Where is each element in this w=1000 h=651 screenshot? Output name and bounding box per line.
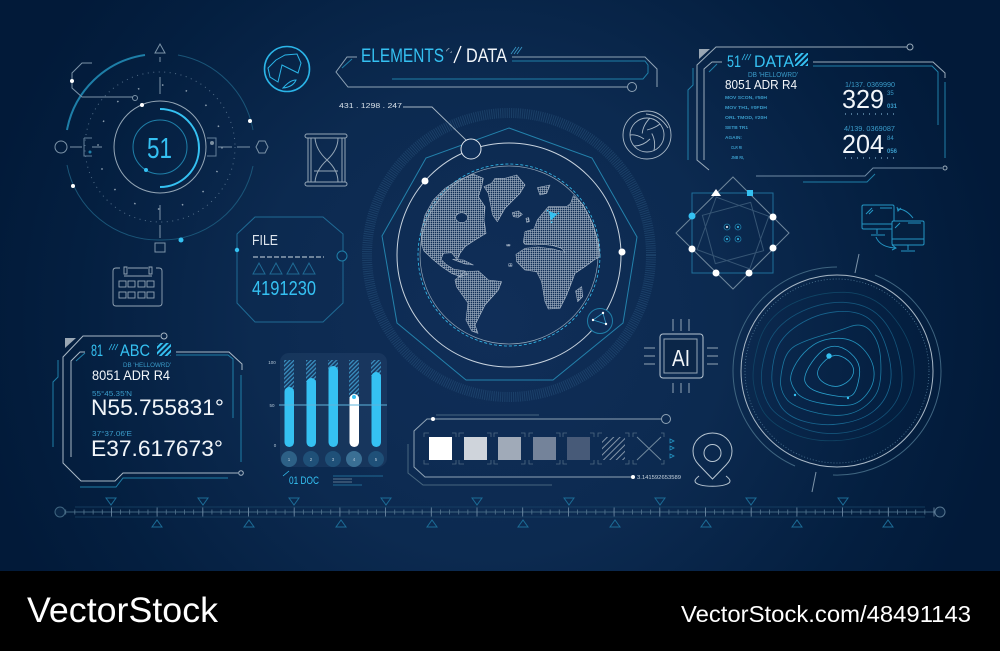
icon: map pin: [693, 433, 732, 486]
panel: data: 056: [887, 149, 898, 155]
world map: [421, 174, 600, 333]
panel: file: [235, 217, 347, 322]
palette panel: 3.141592653589: [637, 475, 681, 481]
panel: data: JNB RI,: [731, 155, 744, 160]
panel: data: DATA: [754, 52, 795, 71]
icon: earth: [264, 46, 310, 92]
radar gauge: 51: [147, 133, 172, 165]
icon: monitors: [862, 205, 924, 251]
panel: data: 1/137. 0369990: [845, 82, 895, 89]
terrain map: [733, 254, 941, 492]
panel: data: 329: [842, 84, 884, 114]
panel: data: AGAIN:: [725, 135, 743, 140]
panel: data: MOV TH1, #0FDH: [725, 105, 767, 110]
footer band: [0, 571, 1000, 651]
panel: data: 204: [842, 129, 884, 159]
bar chart: 100: [268, 360, 276, 365]
panel: coordinates: 55°45.35'N: [92, 390, 132, 398]
bar chart: 01 DOC: [289, 475, 319, 487]
bar chart: 0: [274, 443, 277, 448]
panel: coordinates: 37°37.06'E: [92, 430, 132, 438]
panel: coordinates: E37.617673°: [91, 436, 223, 461]
footer band: VectorStock.com/48491143: [681, 601, 971, 627]
panel: data: 51: [727, 52, 741, 71]
panel: coordinates: 8051 ADR R4: [92, 367, 170, 383]
panel: data: DB 'HELLOWRD': [748, 72, 798, 79]
bar chart: [268, 353, 387, 487]
panel: data: ORL TMOD, #20H: [725, 115, 767, 120]
contour lines: [753, 292, 914, 441]
icon: AI chip: [644, 319, 718, 393]
panel: data: 35: [887, 91, 894, 97]
panel: data: CLR RI: [731, 145, 742, 150]
panel: data: 4/139. 0369087: [844, 126, 895, 133]
panel: data: 031: [887, 104, 898, 110]
bar chart: 4: [353, 457, 356, 462]
geometric diagram: [676, 177, 789, 289]
icon: AI chip: AI: [672, 345, 690, 371]
header panel: elements / data: DATA: [466, 45, 507, 67]
bar chart: 3: [332, 457, 335, 462]
panel: data: 84: [887, 136, 894, 142]
bar chart: 2: [310, 457, 313, 462]
bar chart: 1: [288, 457, 291, 462]
panel: coordinates: DB 'HELLOWRD': [123, 362, 171, 369]
globe: [367, 113, 651, 397]
timeline: [55, 498, 945, 527]
panel: coordinates: N55.755831°: [91, 395, 224, 420]
icon: calendar: [113, 267, 162, 306]
panel: data: MOV SCON, #50H: [725, 95, 767, 100]
coordinate label: 431 . 1298 . 247: [339, 103, 402, 110]
panel: data: [688, 44, 947, 182]
panel: coordinates: [53, 333, 243, 487]
panel: data: SETB TR1: [725, 125, 749, 130]
radar gauge: [55, 44, 268, 252]
panel: coordinates: ABC: [120, 341, 150, 360]
palette panel: [408, 414, 681, 485]
coordinate label: [339, 103, 467, 141]
header panel: elements / data: ELEMENTS: [361, 45, 444, 67]
icon: hourglass: [305, 134, 347, 186]
panel: file: FILE: [252, 232, 278, 249]
icon: network badge: [588, 308, 612, 334]
bar chart: 5: [375, 457, 378, 462]
header panel: elements / data: [336, 45, 657, 92]
footer band: VectorStock: [27, 591, 219, 630]
icon: aperture: [623, 111, 671, 159]
panel: file: 4191230: [252, 278, 316, 300]
panel: data: 8051 ADR R4: [725, 77, 797, 92]
panel: coordinates: 81: [91, 341, 103, 360]
bar chart: 50: [269, 403, 275, 408]
